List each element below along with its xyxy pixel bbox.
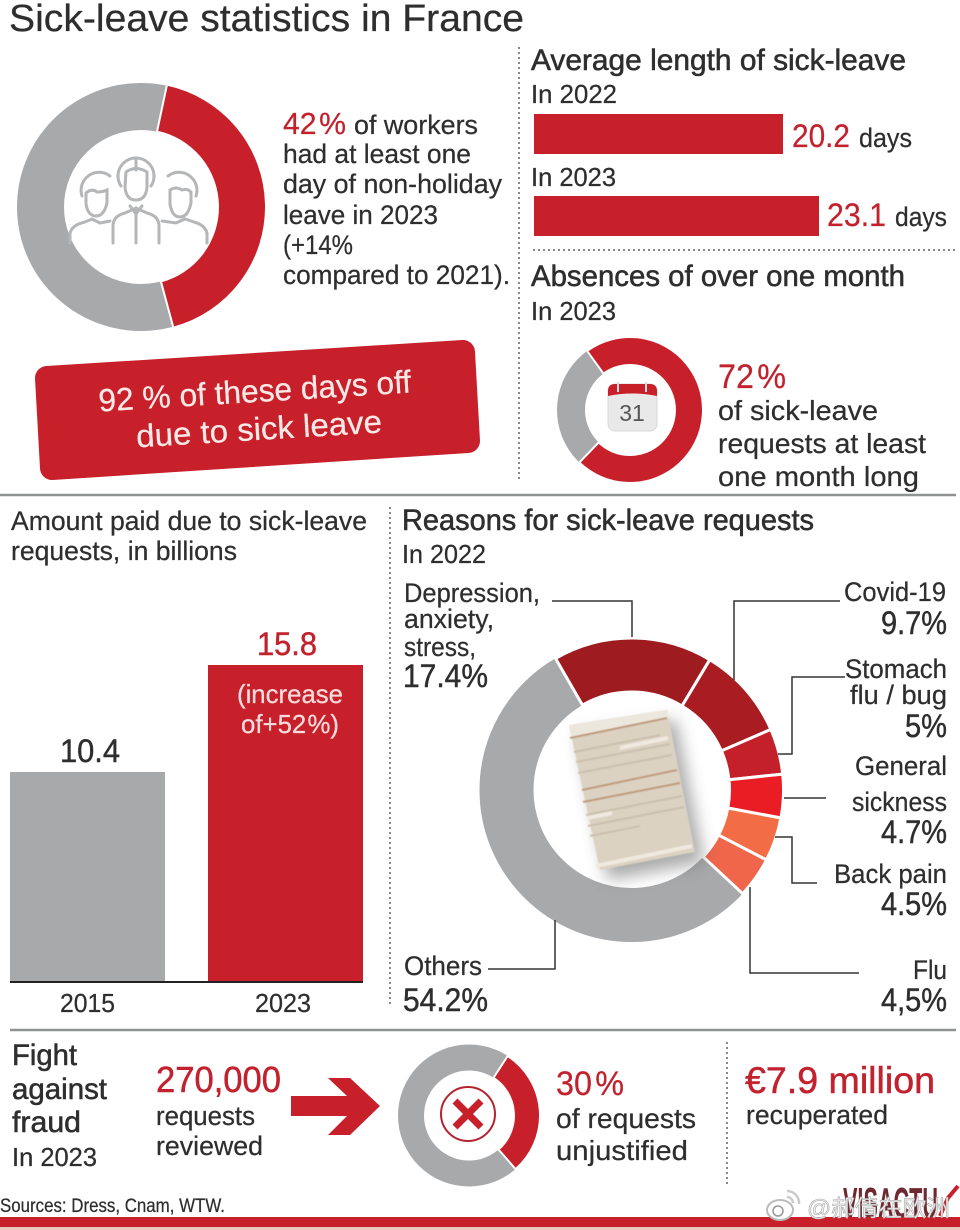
panel: average length of sick-leave bbox=[531, 44, 947, 236]
donut chart: 42% of workers bbox=[40, 85, 266, 328]
label: general sickness bbox=[852, 751, 947, 850]
bar: 2015 bbox=[10, 733, 165, 1018]
heading bbox=[11, 506, 367, 566]
label: depression bbox=[403, 578, 540, 694]
label: depression: stress, bbox=[404, 632, 476, 662]
donut chart: 30% bbox=[411, 1056, 540, 1174]
bar: 2023: In 2023 bbox=[531, 162, 616, 192]
image: sick-leave form bbox=[569, 710, 704, 880]
panel: absences of over one month bbox=[531, 260, 926, 492]
stat: 30% unjustified bbox=[556, 1065, 696, 1166]
text: 42% of workers bbox=[283, 106, 510, 290]
stat: 30% unjustified: of requests bbox=[556, 1103, 696, 1134]
callout: 92% of days off: 92 % of these days off bbox=[97, 364, 412, 419]
label: flu: 4,5% bbox=[881, 982, 947, 1018]
stat: 30% unjustified: 30 % bbox=[556, 1065, 624, 1103]
stat: requests reviewed: reviewed bbox=[156, 1131, 263, 1161]
text: 42% of workers: (+14% bbox=[283, 230, 353, 260]
stat: amount recuperated bbox=[745, 1060, 935, 1130]
bar: 2023 bbox=[208, 626, 363, 1018]
bar: 2015: 2015 bbox=[60, 988, 115, 1018]
heading: against bbox=[12, 1073, 108, 1106]
stat: requests reviewed bbox=[156, 1059, 281, 1161]
panel: reasons for sick-leave requests bbox=[402, 504, 947, 1018]
text: 72% of requests bbox=[718, 358, 926, 492]
subheading: In 2023 bbox=[531, 296, 616, 326]
callout: 92% of days off: due to sick leave bbox=[135, 403, 383, 454]
label: flu bbox=[881, 955, 947, 1018]
leader lines bbox=[488, 601, 859, 973]
label: back pain bbox=[834, 859, 947, 922]
bar: 2023: of+52 %) bbox=[241, 709, 339, 739]
stat: amount recuperated: €7.9 million bbox=[745, 1060, 935, 1101]
label: stomach flu: flu / bug bbox=[850, 680, 947, 710]
label: covid-19: 9.7% bbox=[881, 605, 947, 641]
label: back pain: 4.5% bbox=[881, 886, 947, 922]
text: 72% of requests: of sick-leave bbox=[718, 395, 878, 426]
label: depression: 17.4% bbox=[403, 658, 488, 694]
text: 42% of workers: day of non-holiday bbox=[283, 169, 502, 199]
watermark: @郝倩在欧洲 bbox=[807, 1195, 950, 1221]
sources: Sources: Dress, Cnam, WTW. bbox=[0, 1196, 225, 1217]
heading: In 2023 bbox=[12, 1142, 97, 1172]
icon: calendar: 31 bbox=[619, 400, 645, 426]
panel: share of workers on leave bbox=[40, 85, 510, 468]
label: others: Others bbox=[404, 951, 482, 981]
label: covid-19: Covid-19 bbox=[844, 577, 946, 607]
label: back pain: Back pain bbox=[834, 859, 947, 889]
heading: fraud bbox=[12, 1106, 81, 1139]
panel: amount paid bbox=[10, 506, 367, 1018]
label: general sickness: 4.7% bbox=[881, 814, 947, 850]
label: others: 54.2% bbox=[403, 982, 488, 1018]
icon: cross in circle bbox=[441, 1087, 495, 1141]
heading: Reasons for sick-leave requests bbox=[402, 504, 814, 537]
text: 72% of requests: 72 % bbox=[718, 358, 786, 396]
heading bbox=[12, 1039, 108, 1172]
bar: 2023: 15.8 bbox=[257, 626, 317, 662]
bar: 2022: In 2022 bbox=[531, 79, 617, 109]
stat: requests reviewed: 270,000 bbox=[156, 1059, 281, 1100]
bar: 2023 bbox=[531, 162, 947, 236]
heading: Fight bbox=[12, 1039, 78, 1072]
bar: 2015: 10.4 bbox=[60, 733, 120, 769]
bar: 2023: 23.1 bbox=[827, 197, 886, 233]
bar: 2023: 2023 bbox=[255, 988, 311, 1018]
donut chart: 72% bbox=[571, 337, 703, 483]
label: general sickness: General bbox=[855, 751, 947, 781]
text: 42% of workers: 42 % bbox=[283, 106, 346, 141]
bar chart bbox=[10, 626, 363, 1018]
bar: 2023: days bbox=[895, 202, 947, 232]
heading: requests, in billions bbox=[11, 536, 237, 566]
heading: Absences of over one month bbox=[531, 260, 905, 293]
heading: Amount paid due to sick-leave bbox=[11, 506, 367, 536]
icon: three people bbox=[70, 158, 207, 243]
label: covid-19 bbox=[844, 577, 947, 641]
heading: Average length of sick-leave bbox=[531, 44, 906, 77]
stat: requests reviewed: requests bbox=[156, 1101, 255, 1131]
bar: 2022: 20.2 bbox=[792, 118, 850, 154]
bar: 2022: days bbox=[859, 123, 912, 153]
bar: 2022 bbox=[531, 79, 912, 154]
label: general sickness: sickness bbox=[852, 787, 947, 817]
label: stomach flu bbox=[845, 654, 947, 744]
label: depression: anxiety, bbox=[404, 604, 494, 634]
donut chart: reasons bbox=[506, 638, 784, 915]
label: stomach flu: Stomach bbox=[845, 654, 947, 684]
subheading: In 2022 bbox=[402, 539, 486, 569]
icon: calendar bbox=[608, 382, 657, 431]
text: 72% of requests: requests at least bbox=[718, 428, 926, 459]
stat: 30% unjustified: unjustified bbox=[556, 1135, 688, 1166]
text: 42% of workers: of workers bbox=[354, 110, 478, 140]
label: stomach flu: 5% bbox=[905, 708, 947, 744]
text: 72% of requests: one month long bbox=[718, 461, 919, 492]
stat: amount recuperated: recuperated bbox=[746, 1100, 888, 1130]
watermark bbox=[767, 1191, 950, 1221]
label: others bbox=[403, 951, 488, 1018]
label: flu: Flu bbox=[913, 955, 947, 985]
footer band bbox=[0, 1217, 960, 1230]
text: 42% of workers: had at least one bbox=[283, 139, 471, 169]
text: 42% of workers: compared to 2021). bbox=[283, 260, 510, 290]
text: 42% of workers: leave in 2023 bbox=[283, 200, 438, 230]
bar: 2023: (increase bbox=[237, 679, 343, 709]
arrow bbox=[291, 1078, 380, 1135]
callout: 92% of days off bbox=[47, 352, 468, 468]
label: depression: Depression, bbox=[404, 578, 540, 608]
panel: fight against fraud bbox=[12, 1039, 935, 1174]
